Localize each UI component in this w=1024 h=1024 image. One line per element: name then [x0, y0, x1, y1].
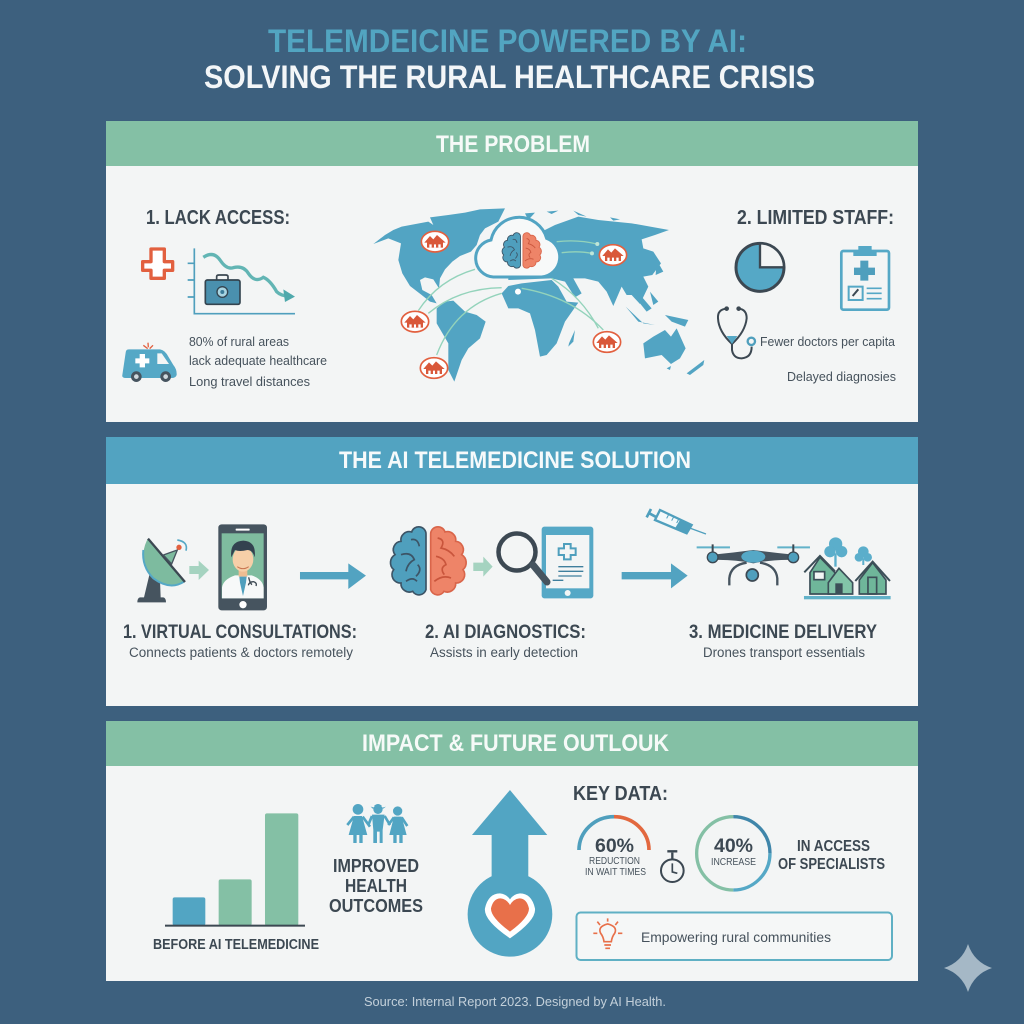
world map with cloud AI — [373, 208, 704, 382]
text: in access of specialists: OF SPECIALISTS — [778, 856, 885, 873]
step 2 label: 2. AI DIAGNOSTICS: — [425, 622, 586, 643]
map: continents — [373, 208, 704, 382]
title — [204, 23, 815, 95]
text: limited staff details: Delayed diagnosies — [787, 369, 896, 384]
step 3 label: Drones transport essentials — [703, 645, 865, 660]
icon: phone with doctor — [218, 524, 267, 610]
gauge: 40 percent increase: INCREASE — [711, 856, 756, 868]
icon: magnifier — [498, 534, 547, 582]
title: SOLVING THE RURAL HEALTHCARE CRISIS — [204, 59, 815, 95]
callout: empowering rural communities — [576, 912, 892, 960]
heading: key data: KEY DATA: — [573, 782, 668, 805]
bar chart label: BEFORE AI TELEMEDICINE — [153, 937, 319, 953]
heading: solution — [106, 437, 918, 484]
icon: village — [804, 537, 891, 599]
text: improved health outcomes: OUTCOMES — [329, 896, 423, 916]
text: improved health outcomes: IMPROVED — [333, 856, 419, 876]
subheading: limited staff: 2. LIMITED STAFF: — [737, 207, 894, 229]
heading: the problem — [106, 121, 918, 166]
source footer: Source: Internal Report 2023. Designed by AI Health. — [364, 994, 666, 1009]
panel: the problem — [106, 121, 918, 422]
text: lack access details: lack adequate healthcare — [189, 353, 327, 368]
text: in access of specialists: IN ACCESS — [797, 838, 870, 855]
icon: pie chart — [736, 243, 784, 291]
arrow: brain to magnifier — [473, 557, 493, 577]
heading: impact: IMPACT & FUTURE OUTLOUK — [362, 730, 670, 757]
arrow: step 2 to 3 — [622, 563, 688, 588]
arrow: step 1 to 2 — [300, 563, 366, 589]
icon: drone — [697, 544, 810, 585]
icon: satellite dish — [137, 539, 186, 602]
step 2 label: Assists in early detection — [430, 645, 578, 660]
panel: the AI telemedicine solution — [106, 437, 918, 706]
gauge: 60 percent reduction — [579, 817, 649, 878]
icon: red cross — [143, 249, 173, 278]
heading: solution: THE AI TELEMEDICINE SOLUTION — [339, 447, 691, 474]
icon: brain — [502, 233, 541, 268]
heading: the problem: THE PROBLEM — [436, 131, 590, 158]
icon: brain — [390, 527, 466, 595]
step 3 label: 3. MEDICINE DELIVERY — [689, 622, 877, 643]
chart: declining access — [188, 248, 295, 314]
step 1 label: Connects patients & doctors remotely — [129, 645, 353, 660]
icon: ambulance — [122, 343, 177, 382]
icon: stethoscope — [718, 307, 755, 358]
text: lack access details: Long travel distances — [189, 374, 310, 389]
text: lack access details — [189, 334, 327, 389]
icon: sparkle — [944, 944, 992, 992]
icon: syringe — [647, 509, 706, 534]
bar chart — [165, 813, 305, 927]
gauge: 40 percent increase — [697, 817, 770, 890]
text: improved health outcomes: HEALTH — [345, 876, 407, 896]
gauge: 60 percent reduction: 60% — [595, 836, 634, 857]
icon: up arrow with heart — [468, 790, 552, 957]
text: improved health outcomes — [329, 856, 423, 916]
step 3 label — [689, 622, 877, 660]
text: limited staff details — [760, 334, 896, 384]
step 1 label — [123, 622, 357, 660]
icon: cloud — [476, 217, 560, 277]
callout: empowering rural communities: Empowering rural communities — [641, 929, 831, 945]
text: in access of specialists — [778, 838, 885, 873]
heading: impact — [106, 721, 918, 766]
title: TELEMDEICINE POWERED BY AI: — [268, 23, 747, 59]
icon: people — [347, 804, 407, 843]
step 1 label: 1. VIRTUAL CONSULTATIONS: — [123, 622, 357, 643]
step 2 label — [425, 622, 586, 660]
icon: stopwatch — [661, 851, 684, 882]
text: limited staff details: Fewer doctors per capita — [760, 334, 896, 349]
gauge: 60 percent reduction: IN WAIT TIMES — [585, 867, 646, 878]
icon: light bulb — [593, 918, 622, 948]
icon: tablet — [542, 527, 593, 598]
panel: impact and future outlook — [106, 721, 918, 981]
text: lack access details: 80% of rural areas — [189, 334, 289, 349]
icon: rural house badges — [401, 231, 627, 378]
gauge: 40 percent increase: 40% — [714, 836, 753, 857]
subheading: lack access: 1. LACK ACCESS: — [146, 207, 290, 229]
arcs: connections — [418, 241, 603, 355]
gauge: 60 percent reduction: REDUCTION — [589, 856, 640, 867]
icon: clipboard — [841, 246, 889, 310]
arrow: dish to phone — [189, 561, 209, 580]
